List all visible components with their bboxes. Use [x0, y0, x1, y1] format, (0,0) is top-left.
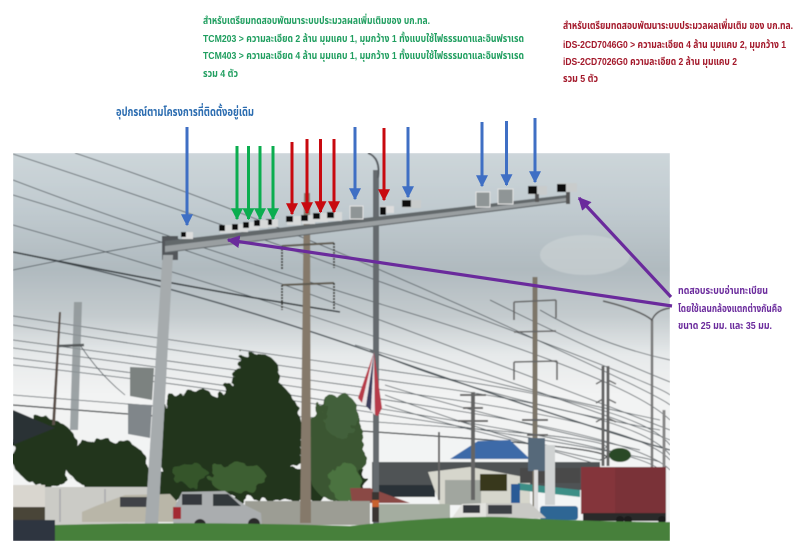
text block: green specification: สำหรับเตรียมทดสอบพัฒนาระบบประมวลผลเพิ่มเติมของ บก.ทล.: [203, 14, 430, 27]
main pole foreground: [145, 255, 173, 524]
text block: red specification: รวม 5 ตัว: [563, 73, 598, 85]
trees: [11, 353, 365, 502]
distant cars: [452, 503, 578, 520]
text block: plate reader test note: ทดสอบระบบอ่านทะเบียน: [678, 284, 768, 297]
text block: plate reader test note: ขนาด 25 มม. และ 35 มม.: [678, 320, 772, 332]
control boxes: [128, 367, 154, 438]
purple arrows: LPR cameras: [228, 198, 672, 306]
text block: plate reader test note: [678, 284, 782, 332]
text block: red specification: iDS-2CD7026G0 ความละเอียด 2 ล้าน มุมแคบ 2: [563, 55, 737, 68]
streetlight pole with flag: [358, 153, 382, 525]
wall: [13, 485, 450, 526]
concrete pole and crossarms: [282, 193, 334, 523]
buildings: [13, 410, 600, 505]
shipping container: [581, 467, 666, 524]
green test cameras: [219, 219, 278, 233]
floodlight and cameras along arm: [350, 183, 577, 219]
existing camera: [181, 232, 193, 239]
right utility poles: [439, 277, 670, 520]
red test cameras: [286, 212, 342, 225]
text block: green specification: TCM203 > ความละเอียด 2 ล้าน มุมแคบ 1, มุมกว้าง 1 ทั้งแบบใช้ไฟธรรมดาและอินฟราเรด: [203, 31, 524, 45]
text block: green specification: รวม 4 ตัว: [203, 68, 238, 80]
green arrows: TCM cameras: [237, 146, 273, 219]
text block: red specification: [563, 19, 793, 85]
gantry: upright, arm and equipment: [128, 183, 570, 494]
text block: green specification: [203, 14, 524, 80]
panel: roadside gantry photo: [11, 153, 670, 541]
distant tree: [609, 448, 631, 462]
pickup trucks: [82, 490, 262, 524]
dark vehicle: [13, 520, 55, 541]
blue arrows: existing equipment: [187, 118, 535, 225]
text block: green specification: TCM403 > ความละเอียด 4 ล้าน มุมแคบ 1, มุมกว้าง 1 ทั้งแบบใช้ไฟธรรมดาและอินฟราเรด: [203, 48, 524, 62]
sign post: [528, 438, 555, 520]
wires: [13, 153, 670, 470]
red arrows: iDS cameras: [292, 128, 384, 214]
left pole and lattice tower: [52, 302, 84, 430]
heading: existing project equipment: อุปกรณ์ตามโครงการที่ติดตั้งอยู่เดิม: [116, 103, 254, 120]
grass verge: [55, 517, 670, 541]
